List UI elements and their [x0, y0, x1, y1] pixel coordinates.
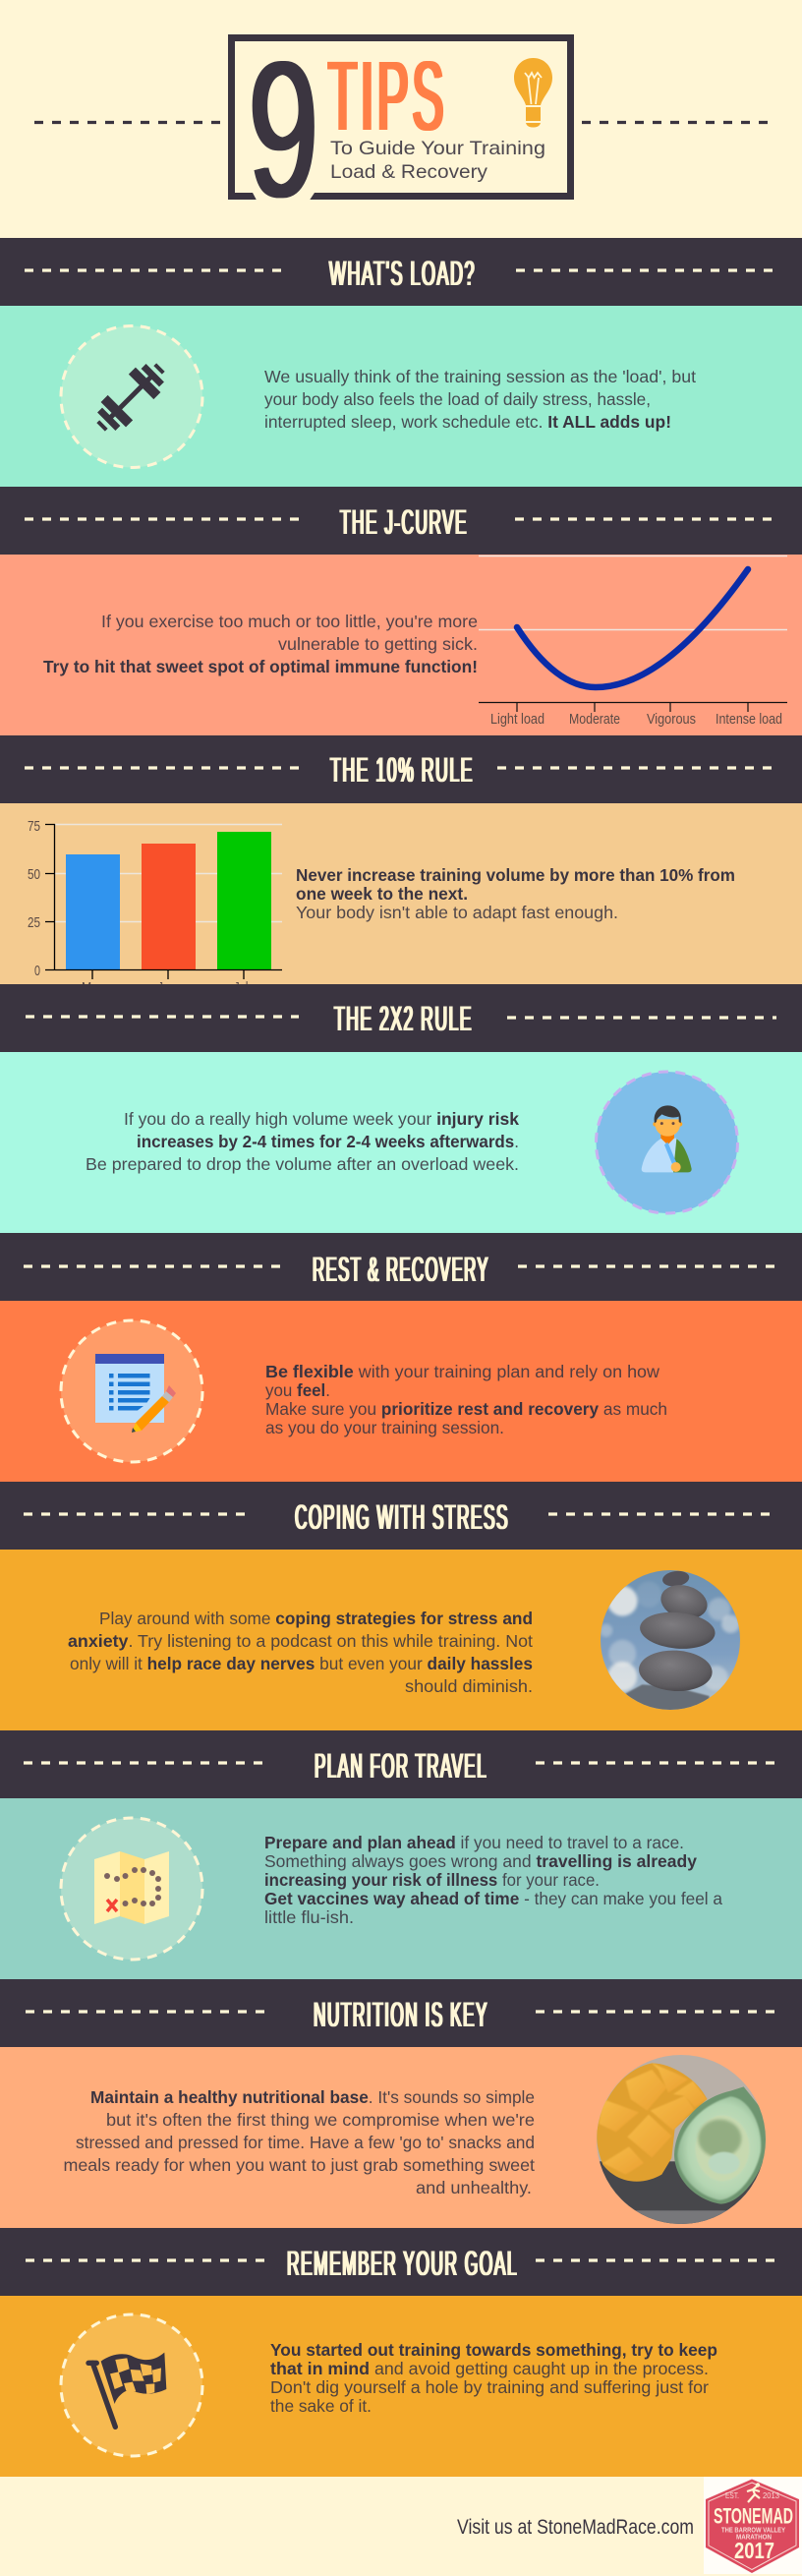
text: goal advice — [270, 2340, 717, 2416]
chart: J-curve: Intense load — [716, 711, 782, 728]
subtitle: Load & Recovery — [330, 161, 487, 183]
header bar — [0, 2228, 802, 2296]
section 6: coping with stress — [0, 1482, 802, 1730]
text: travel advice: Something always goes wrong and travelling is already — [264, 1851, 697, 1871]
text: goal advice: Don't dig yourself a hole by training and suffering just for — [270, 2377, 709, 2397]
header bar: THE 10% RULE — [330, 751, 474, 790]
text: 10 percent rule — [296, 865, 735, 922]
logo: StoneMad badge: 2017 — [734, 2538, 774, 2563]
text: 10 percent rule: one week to the next. — [296, 884, 468, 904]
title block — [34, 23, 769, 238]
text: J-curve explanation: Try to hit that sweet spot of optimal immune function! — [43, 657, 478, 676]
icon: notepad and pencil in circle — [61, 1320, 202, 1462]
chart: J-curve — [479, 556, 787, 728]
title frame — [232, 37, 570, 197]
bar chart: monthly volume: May — [82, 979, 104, 996]
frame gap behind the 9 — [253, 193, 315, 201]
section 2: J-curve — [0, 487, 802, 735]
text: travel advice: Get vaccines way ahead of time - they can make you feel a — [264, 1889, 722, 1908]
text: 2x2 rule — [86, 1109, 519, 1174]
bar chart: monthly volume: 75 — [28, 818, 40, 835]
section 9: remember your goal — [0, 2228, 802, 2477]
text: coping strategies — [68, 1609, 533, 1696]
subtitle — [330, 138, 545, 183]
icon: treasure map in circle — [61, 1818, 202, 1960]
header bar: THE 2X2 RULE — [334, 1000, 473, 1038]
panel: aqua — [0, 1052, 802, 1233]
header bar: REST & RECOVERY — [313, 1251, 489, 1289]
bar chart: monthly volume — [28, 818, 282, 996]
text: 10 percent rule: Never increase training volume by more than 10% from — [296, 865, 735, 885]
text: load description: We usually think of the training session as the 'load', but — [264, 367, 696, 386]
logo: StoneMad badge: 2013 — [763, 2490, 779, 2500]
text: travel advice: increasing your risk of illness for your race. — [264, 1870, 600, 1890]
icon: dumbbell in circle — [61, 326, 202, 468]
header bar — [0, 1979, 802, 2047]
text: goal advice: that in mind and avoid getting caught up in the process. — [270, 2359, 709, 2378]
text: goal advice: You started out training towards something, try to keep — [270, 2340, 717, 2360]
logo: StoneMad badge: MARATHON — [736, 2535, 772, 2541]
header bar — [0, 735, 802, 803]
image: stacked stones — [600, 1569, 740, 1714]
text: nutrition advice: Maintain a healthy nutritional base. It's sounds so simple — [90, 2087, 535, 2107]
text: coping strategies: Play around with some coping strategies for stress and — [99, 1609, 533, 1628]
chart: J-curve: Moderate — [569, 711, 620, 728]
logo: StoneMad badge — [704, 2477, 802, 2574]
header bar: WHAT'S LOAD? — [329, 255, 476, 293]
panel: amber — [0, 2296, 802, 2477]
chart: J-curve: Light load — [490, 711, 544, 728]
header bar: PLAN FOR TRAVEL — [315, 1747, 487, 1786]
section 5: rest and recovery — [0, 1233, 802, 1482]
header bar — [0, 984, 802, 1052]
bar chart: monthly volume: June — [158, 979, 179, 996]
header bar: NUTRITION IS KEY — [314, 1996, 488, 2034]
panel: peach — [0, 2047, 802, 2228]
section 8: nutrition — [0, 1979, 802, 2228]
bar chart: monthly volume: 0 — [34, 963, 40, 979]
text: coping strategies: anxiety. Try listening to a podcast on this while training. Not — [68, 1631, 533, 1651]
text: nutrition advice: stressed and pressed for time. Have a few 'go to' snacks and — [76, 2133, 535, 2152]
footer link text: Visit us at StoneMadRace.com — [457, 2516, 694, 2539]
bar chart: monthly volume: July — [234, 979, 254, 996]
logo: StoneMad badge: EST. — [725, 2490, 739, 2500]
panel: teal — [0, 1798, 802, 1979]
header bar — [0, 487, 802, 555]
text: 2x2 rule: increases by 2-4 times for 2-4 weeks afterwards. — [137, 1132, 519, 1151]
bar chart: monthly volume: 50 — [28, 866, 40, 883]
header bar — [0, 1482, 802, 1550]
text: J-curve explanation: If you exercise too much or too little, you're more — [101, 612, 478, 631]
text: load description — [264, 367, 696, 432]
logo: StoneMad badge: THE BARROW VALLEY — [721, 2526, 785, 2535]
text: travel advice: little flu-ish. — [264, 1907, 354, 1927]
text: nutrition advice: meals ready for when you want to just grab something sweet — [63, 2155, 535, 2175]
icon: checkered flag in circle — [61, 2314, 202, 2456]
text: coping strategies: should diminish. — [405, 1676, 533, 1696]
text: rest and recovery: you feel. — [265, 1380, 330, 1400]
text: 2x2 rule: If you do a really high volume week your injury risk — [124, 1109, 519, 1129]
text: rest and recovery: Make sure you prioritize rest and recovery as much — [265, 1399, 667, 1419]
text: nutrition advice — [63, 2087, 535, 2197]
text: 10 percent rule: Your body isn't able to adapt fast enough. — [296, 903, 618, 922]
image: mango and avocado — [597, 2055, 770, 2227]
text: rest and recovery: Be flexible with your training plan and rely on how — [265, 1362, 659, 1381]
panel: amber — [0, 1550, 802, 1730]
text: J-curve explanation — [43, 612, 478, 676]
text: goal advice: the sake of it. — [270, 2396, 372, 2416]
header bar: REMEMBER YOUR GOAL — [287, 2245, 518, 2283]
header bar: THE J-CURVE — [340, 503, 468, 542]
section 3: 10% rule — [0, 735, 802, 996]
header bar — [0, 1233, 802, 1301]
section 1: What's load — [0, 238, 802, 487]
text: 2x2 rule: Be prepared to drop the volume after an overload week. — [86, 1154, 519, 1174]
panel: salmon — [0, 555, 802, 735]
header bar — [0, 238, 802, 306]
icon: light bulb — [514, 58, 552, 128]
text: nutrition advice: but it's often the first thing we compromise when we're — [106, 2110, 535, 2130]
panel: mint — [0, 306, 802, 487]
header bar: COPING WITH STRESS — [295, 1498, 509, 1537]
section 7: plan for travel — [0, 1730, 802, 1979]
text: nutrition advice: and unhealthy. — [416, 2178, 532, 2197]
title block: TIPS — [328, 41, 447, 151]
text: travel advice: Prepare and plan ahead if you need to travel to a race. — [264, 1833, 684, 1852]
text: load description: your body also feels the load of daily stress, hassle, — [264, 389, 651, 409]
text: coping strategies: only will it help race day nerves but even your daily hassles — [70, 1654, 533, 1673]
header bar — [0, 1730, 802, 1798]
footer — [0, 2477, 802, 2576]
text: J-curve explanation: vulnerable to getting sick. — [278, 634, 478, 654]
subtitle: To Guide Your Training — [330, 138, 545, 159]
text: travel advice — [264, 1833, 722, 1927]
text: load description: interrupted sleep, work schedule etc. It ALL adds up! — [264, 412, 671, 432]
bar chart: monthly volume: 25 — [28, 914, 40, 931]
text: rest and recovery: as you do your training session. — [265, 1418, 504, 1437]
section 4: 2x2 rule — [0, 984, 802, 1233]
icon: injured person in circle — [596, 1072, 737, 1213]
text: rest and recovery — [265, 1362, 667, 1437]
panel: orange — [0, 1301, 802, 1482]
big number 9: 9 — [249, 23, 318, 238]
panel: tan — [0, 803, 802, 984]
chart: J-curve: Vigorous — [647, 711, 696, 728]
